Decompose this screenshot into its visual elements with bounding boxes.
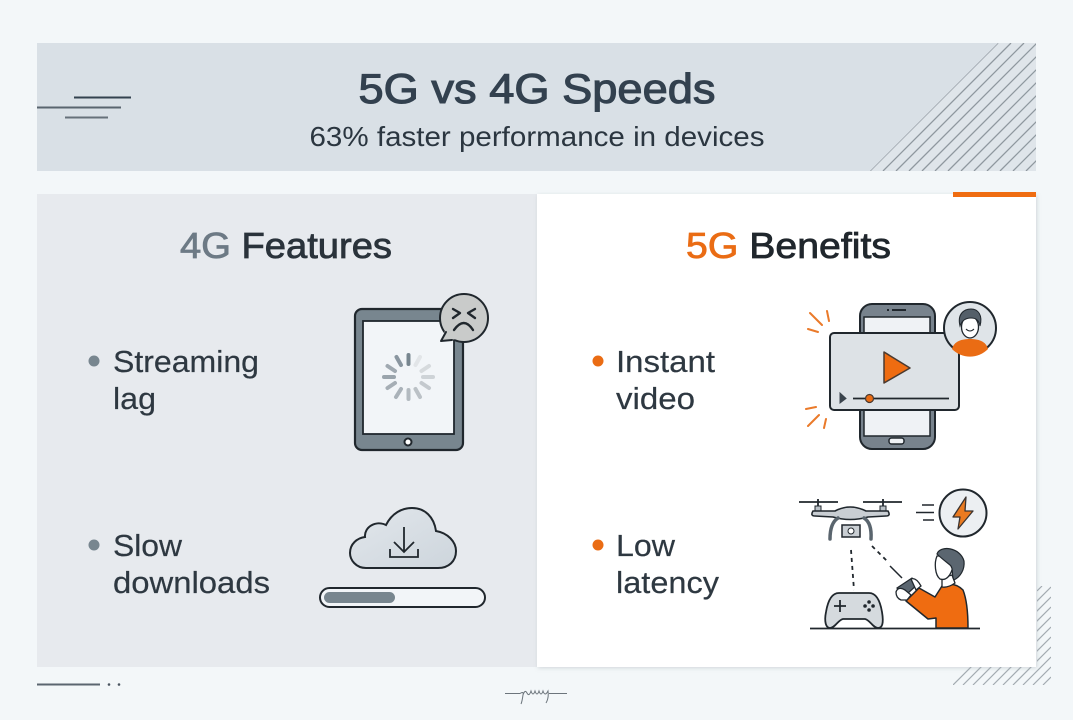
pilot xyxy=(896,549,968,628)
heading: 4G Features: 4G Features xyxy=(180,225,392,266)
table line xyxy=(810,628,980,630)
spinner xyxy=(384,355,433,399)
lightning badge xyxy=(916,490,986,536)
angry bubble xyxy=(440,294,488,342)
subtitle: 63% faster performance in devices xyxy=(310,121,764,152)
item: instant video: Instant xyxy=(616,344,715,379)
icon: phone with video player xyxy=(806,302,996,449)
orange accent bar xyxy=(953,192,1036,197)
item: slow downloads: Slow xyxy=(113,528,183,563)
signature mark xyxy=(505,691,567,704)
item: instant video xyxy=(592,344,715,416)
item: slow downloads: downloads xyxy=(113,565,270,600)
icon: drone, controller and pilot xyxy=(799,490,986,628)
avatar xyxy=(944,302,996,357)
sparks xyxy=(806,311,829,428)
item: low latency: latency xyxy=(616,565,720,600)
item: low latency: Low xyxy=(616,528,676,563)
header banner xyxy=(37,43,1073,171)
title: 5G vs 4G Speeds xyxy=(358,65,716,112)
footer accent xyxy=(37,683,120,686)
signal lines xyxy=(851,546,889,590)
heading: 5G Benefits: 5G Benefits xyxy=(686,225,891,266)
item: streaming lag xyxy=(88,344,259,416)
item: low latency xyxy=(592,528,720,600)
item: streaming lag: lag xyxy=(113,381,156,416)
icon: cloud download with progress bar xyxy=(320,508,485,607)
decorative hatch: bottom right xyxy=(953,586,1051,685)
drone xyxy=(799,499,902,539)
item: slow downloads xyxy=(88,528,270,600)
item: instant video: video xyxy=(616,381,695,416)
decorative speed lines: header xyxy=(37,98,131,118)
panel: 4G features xyxy=(37,194,537,667)
item: streaming lag: Streaming xyxy=(113,344,259,379)
decorative diagonal hatch: header xyxy=(870,43,1036,171)
icon: tablet with spinner and angry bubble xyxy=(355,294,488,450)
panel: 5G benefits xyxy=(537,192,1036,667)
game controller xyxy=(825,593,883,628)
